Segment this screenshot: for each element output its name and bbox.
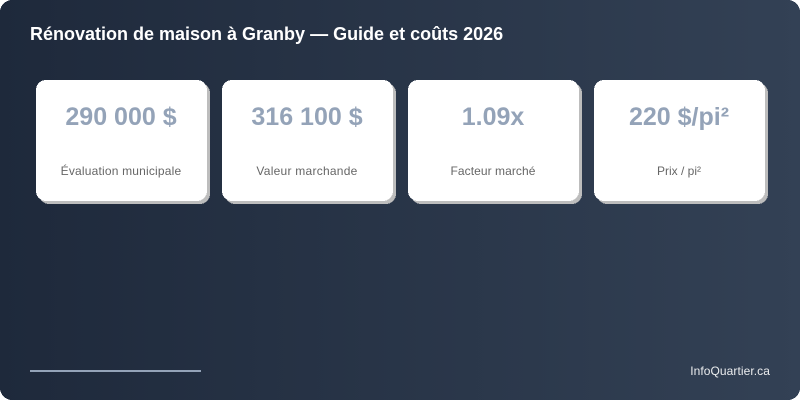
- label: évaluation: Évaluation municipale: [61, 164, 181, 178]
- label: valeur: Valeur marchande: [256, 164, 358, 178]
- title: Rénovation de maison à Granby — Guide et coûts 2026: [30, 24, 503, 44]
- value: valeur: 316 100 $: [251, 103, 363, 131]
- card: prix au pied carré: [594, 80, 768, 204]
- value: prix: 220 $/pi²: [629, 103, 729, 131]
- card: valeur marchande: [222, 80, 396, 204]
- label: facteur: Facteur marché: [450, 164, 536, 178]
- card: évaluation municipale: [36, 80, 210, 204]
- footer source: InfoQuartier.ca: [690, 364, 770, 378]
- value: évaluation: 290 000 $: [65, 103, 177, 131]
- footer accent line: [30, 370, 201, 372]
- label: prix: Prix / pi²: [657, 164, 701, 178]
- value: facteur: 1.09x: [462, 103, 524, 131]
- card: facteur marché: [408, 80, 582, 204]
